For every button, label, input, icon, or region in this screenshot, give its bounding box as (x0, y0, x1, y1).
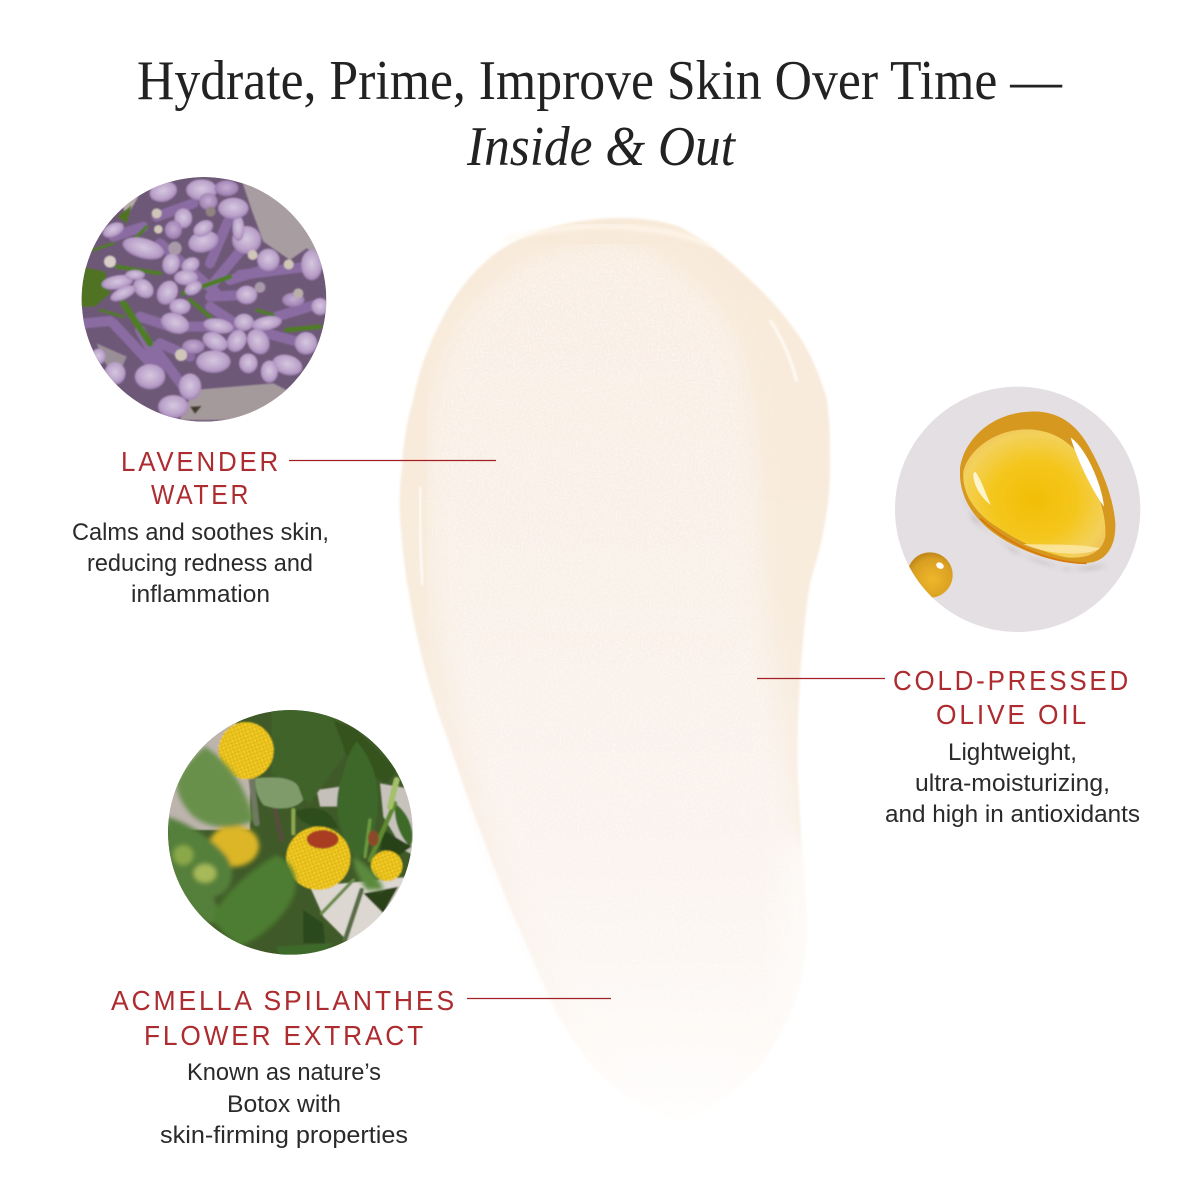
image: lilac flowers (80, 173, 333, 422)
ingredient: lavender water: LAVENDER (121, 446, 281, 477)
cream swatch (400, 218, 830, 1140)
ingredient: acmella spilanthes flower extract: skin-firming properties (160, 1122, 408, 1149)
title: Inside & Out (466, 116, 736, 178)
ingredient: acmella spilanthes flower extract: Known as nature’s (187, 1059, 381, 1086)
ingredient: cold-pressed olive oil: OLIVE OIL (936, 699, 1089, 730)
ingredient: lavender water: WATER (151, 479, 251, 510)
ingredient: cold-pressed olive oil: and high in antioxidants (885, 801, 1140, 828)
ingredient: cold-pressed olive oil: COLD-PRESSED (893, 665, 1131, 696)
image: acmella flower buds (163, 710, 417, 957)
callout line: lavender (289, 460, 496, 462)
image: olive oil drops (895, 387, 1140, 632)
callout line: acmella (467, 998, 611, 1000)
ingredient: lavender water: Calms and soothes skin, (72, 519, 329, 546)
ingredient: lavender water (72, 446, 329, 608)
ingredient: cold-pressed olive oil (885, 665, 1140, 828)
ingredient: acmella spilanthes flower extract (111, 985, 457, 1149)
ingredient: cold-pressed olive oil: Lightweight, (948, 739, 1077, 766)
ingredient: lavender water: inflammation (131, 581, 270, 608)
title (137, 50, 1063, 178)
ingredient: acmella spilanthes flower extract: Botox with (227, 1091, 341, 1118)
ingredient: acmella spilanthes flower extract: FLOWER EXTRACT (144, 1020, 426, 1051)
title: Hydrate, Prime, Improve Skin Over Time — (137, 50, 1063, 112)
ingredient: cold-pressed olive oil: ultra-moisturizing, (915, 770, 1110, 797)
ingredient: acmella spilanthes flower extract: ACMELLA SPILANTHES (111, 985, 457, 1016)
ingredient: lavender water: reducing redness and (87, 550, 313, 577)
callout line: olive oil (757, 678, 885, 680)
